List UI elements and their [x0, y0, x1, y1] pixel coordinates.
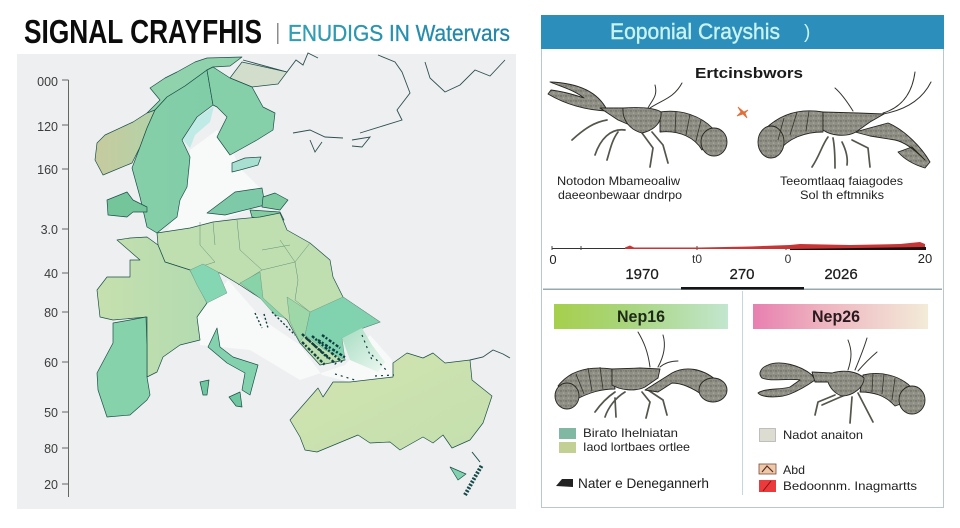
map: Turkey — [290, 353, 492, 452]
legend: left: Birato Ihelniatan — [583, 426, 678, 440]
map: sea highlights — [165, 130, 392, 382]
map: borders — [190, 220, 310, 270]
caption: left species: daeeonbewaar dndrpo — [558, 188, 682, 202]
map: gulf of Bothnia shallows — [183, 106, 214, 148]
legend: right: Nadot anaiton — [783, 428, 863, 442]
map: Finland — [207, 67, 275, 155]
caption: left species: Notodon Mbameoaliw — [557, 174, 680, 188]
footnote: left: Nater e Denegannerh — [578, 475, 709, 491]
map: Y axis: 60 — [44, 356, 58, 370]
panel header: Eoponial Crayshis — [610, 19, 780, 44]
timeline chart — [549, 242, 932, 283]
map: central Europe — [157, 213, 380, 365]
map: Greek islands — [255, 312, 394, 380]
map: Norway north — [147, 57, 242, 125]
map: Alpine teal zone — [190, 264, 227, 303]
map: Cyprus — [450, 452, 482, 495]
map: Y axis: 120 — [37, 120, 58, 134]
section divider — [543, 287, 942, 495]
map: Balkan fill — [238, 262, 385, 372]
map: Iberia — [97, 317, 150, 417]
banner: left: Nep16 — [617, 307, 665, 326]
timeline chart: 0 — [549, 252, 557, 267]
title: SIGNAL CRAYFHIS — [24, 13, 262, 50]
map: Y axis: 3.0 — [41, 223, 58, 237]
legend: right — [759, 428, 917, 493]
panel: species and timeline — [541, 15, 944, 508]
map: Y axis: 160 — [37, 163, 58, 177]
timeline chart: 270 — [729, 266, 755, 283]
map: Gotland island — [232, 157, 261, 172]
map: Y axis — [37, 75, 68, 497]
legend: left — [559, 426, 690, 454]
map: Y axis: 20 — [44, 478, 58, 492]
crayfish: top left — [548, 82, 727, 167]
map: Kola region — [230, 62, 287, 87]
crayfish: bottom right — [758, 338, 925, 423]
timeline chart: 1970 — [625, 266, 659, 283]
map: Y axis: 50 — [44, 406, 58, 420]
map: Sicily — [229, 392, 242, 407]
banner: right: Nep26 — [812, 307, 860, 326]
map: Sweden — [132, 70, 213, 233]
crayfish: bottom left — [555, 332, 727, 418]
caption: left species — [557, 174, 682, 202]
map: Y axis: 80 — [44, 306, 58, 320]
map: northern coastlines — [243, 53, 505, 152]
map: Y axis: 000 — [37, 75, 58, 89]
map: Baltic coast states — [207, 188, 288, 220]
subheading: Ertcinsbwors — [695, 65, 803, 82]
title — [24, 13, 510, 50]
timeline chart: t0 — [692, 252, 702, 266]
icon: orange marker — [737, 107, 748, 118]
crayfish: top right — [758, 72, 931, 168]
timeline chart: 20 — [918, 251, 932, 266]
banner: left — [554, 304, 728, 329]
legend: left: Iaod lortbaes ortlee — [583, 440, 690, 454]
legend: right: Abd — [783, 463, 805, 477]
map: Sardinia — [200, 380, 209, 395]
map: France — [97, 237, 207, 377]
map: Y axis: 80 — [44, 442, 58, 456]
caption: right species: Teeomtlaaq faiagodes — [780, 174, 903, 188]
timeline chart: 2026 — [824, 266, 858, 283]
timeline chart: 0 — [785, 252, 792, 266]
panel header — [541, 15, 944, 49]
panel header: ) — [804, 22, 810, 43]
map: Italy — [208, 328, 258, 395]
panel: map — [17, 53, 516, 509]
banner: right — [753, 304, 928, 329]
legend: right: Bedoonnm. Inagmartts — [783, 479, 917, 493]
caption: right species: Sol th eftmniks — [800, 188, 884, 202]
map: eastern border line — [470, 350, 510, 360]
caption: right species — [780, 174, 903, 202]
title: ENUDIGS IN Watervars — [288, 20, 510, 46]
map: Y axis: 40 — [44, 267, 58, 281]
map: Denmark — [107, 192, 147, 217]
map: Norway south — [95, 110, 155, 175]
